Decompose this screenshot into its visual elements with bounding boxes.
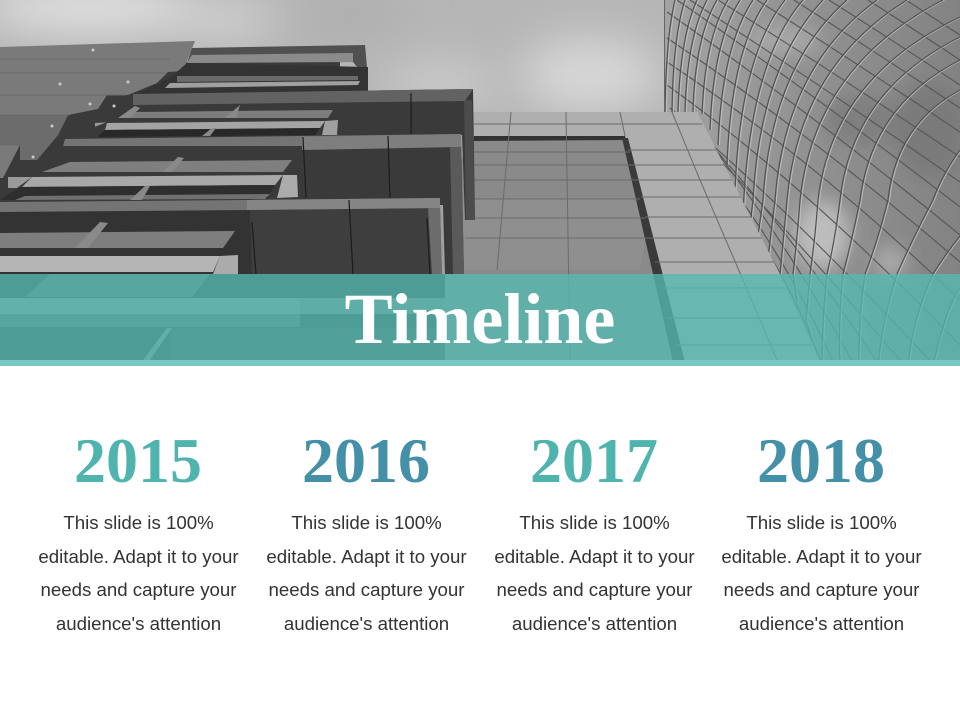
description 2016: This slide is 100% [291,512,442,533]
description 2016: editable. Adapt it to your [266,546,467,567]
solar shade panels [0,41,195,188]
balcony level A [133,45,368,95]
balcony level C with corner box [0,134,464,274]
description 2017: audience's attention [512,613,677,634]
description 2018: This slide is 100% [746,512,897,533]
column: 2016 [266,425,467,634]
description 2015: audience's attention [56,613,221,634]
column: 2018 [721,425,922,634]
description 2017 [494,512,695,634]
central building facade [440,112,822,366]
banner: translucent teal band [0,274,960,360]
year 2018: 2018 [757,425,885,496]
building shadow backing [0,62,340,274]
description 2017: This slide is 100% [519,512,670,533]
description 2015: This slide is 100% [63,512,214,533]
title: Timeline [345,279,615,359]
description 2015 [38,512,239,634]
photo: looking up at office buildings [0,0,960,360]
description 2018 [721,512,922,634]
description 2018: audience's attention [739,613,904,634]
banner: light teal edge [0,360,960,366]
description 2018: needs and capture your [723,579,920,600]
column: 2017 [494,425,695,634]
sky with clouds [0,0,670,366]
description 2016 [266,512,467,634]
tower left edge [664,0,665,112]
description 2017: needs and capture your [496,579,693,600]
tower rib lines [666,0,960,366]
balcony level B with corner box [60,89,475,220]
description 2018: editable. Adapt it to your [721,546,922,567]
year 2017: 2017 [530,425,658,496]
glass tower grid [660,0,960,366]
tower parallel lines [667,0,960,366]
description 2017: editable. Adapt it to your [494,546,695,567]
description 2016: audience's attention [284,613,449,634]
description 2015: editable. Adapt it to your [38,546,239,567]
year 2015: 2015 [74,425,202,496]
column: 2015 [38,425,239,634]
balcony level D with corner box [0,93,445,274]
dark balcony building [0,41,475,366]
description 2016: needs and capture your [268,579,465,600]
year 2016: 2016 [302,425,430,496]
description 2015: needs and capture your [40,579,237,600]
lower storey beneath banner [0,274,445,366]
